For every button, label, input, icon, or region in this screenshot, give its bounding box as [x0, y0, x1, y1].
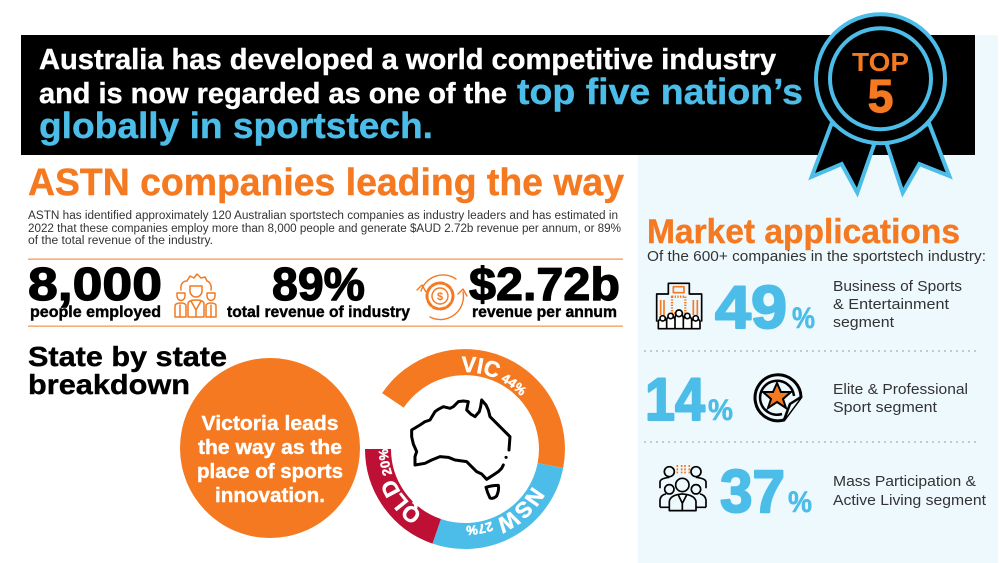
- stat: 89% total revenue: total revenue of industry: [227, 304, 410, 321]
- stat: $2.72b revenue per annum: $2.72b: [469, 258, 620, 310]
- stat: 37%: 37: [720, 458, 785, 525]
- text block: intro paragraph: of the total revenue of the industry.: [28, 235, 213, 247]
- text block: intro paragraph: 2022 that these companies employ more than 8,000 people and generate $AUD 2.72b revenue per annum, or 89%: [28, 223, 621, 235]
- banner line 2: and is now regarded as one of the: [39, 78, 507, 110]
- stat: 49%: [715, 274, 815, 341]
- panel: light blue background: [638, 35, 998, 563]
- stat: 14%: %: [708, 394, 733, 427]
- callout: Victoria leads circle: innovation.: [215, 485, 325, 507]
- heading: market applications: Market applications: [647, 213, 960, 251]
- badge number 5: 5: [868, 70, 893, 122]
- stat: 49%: %: [792, 302, 815, 335]
- banner: black headline: [21, 35, 975, 155]
- text: mass participation: Active Living segment: [833, 492, 987, 509]
- text: mass participation: [833, 473, 987, 509]
- text block: intro paragraph: ASTN has identified approximately 120 Australian sportstech companies as industry leaders and has estimated in: [28, 210, 618, 222]
- heading: state by state breakdown: [28, 341, 227, 400]
- icon: building with crowd: [657, 283, 702, 329]
- stat: 89% total revenue: [227, 258, 410, 321]
- badge text TOP: TOP: [852, 47, 909, 77]
- stat: 8,000 people employed: 8,000: [28, 258, 162, 310]
- text: business of sports: segment: [833, 314, 895, 331]
- text: elite and professional: Sport segment: [833, 399, 938, 416]
- segment: NSW: [437, 466, 550, 536]
- label: QLD 20%: QLD20%: [378, 449, 420, 522]
- icon: star sticker: [755, 375, 801, 421]
- banner line 1: Australia has developed a world competitive industry: [39, 44, 776, 76]
- icon: group of people: [660, 465, 706, 511]
- icon: orange gear with dollar: $: [437, 291, 443, 303]
- text: market applications intro: Of the 600+ companies in the sportstech industry:: [647, 249, 986, 265]
- callout: Victoria leads circle: Victoria leads: [202, 413, 338, 435]
- segment: VIC: [393, 362, 552, 466]
- text: elite and professional: [833, 381, 968, 416]
- segment: QLD: [378, 449, 437, 531]
- label: NSW 27%: NSW27%: [466, 487, 545, 536]
- callout: Victoria leads circle: place of sports: [197, 461, 343, 483]
- label: VIC 44%: VIC44%: [462, 356, 526, 396]
- text: business of sports: [833, 278, 962, 331]
- stat: $2.72b revenue per annum: revenue per annum: [472, 304, 617, 321]
- heading: ASTN companies: ASTN companies leading the way: [28, 162, 624, 204]
- text: elite and professional: Elite & Professional: [833, 381, 968, 398]
- text block: intro paragraph: [28, 210, 621, 247]
- banner highlight: top five nation’s: [517, 71, 803, 112]
- stat: 8,000 people employed: people employed: [30, 304, 161, 321]
- banner line 3: globally in sportstech.: [39, 105, 433, 146]
- text: mass participation: Mass Participation &: [833, 473, 976, 490]
- callout: Victoria leads circle: the way as the: [198, 437, 342, 459]
- chart: state donut: [365, 349, 565, 549]
- icon: orange workers with gear: [175, 274, 216, 317]
- text: business of sports: Business of Sports: [833, 278, 962, 295]
- icon: orange gear with dollar: [417, 275, 467, 320]
- stat: 37%: %: [788, 486, 812, 519]
- text: business of sports: & Entertainment: [833, 296, 950, 313]
- icon: top 5 ribbon badge: [812, 14, 949, 193]
- icon: Australia map: [412, 400, 510, 498]
- callout: Victoria leads circle: [180, 358, 360, 538]
- heading: state by state breakdown: breakdown: [28, 369, 190, 400]
- stat: 49%: 49: [715, 274, 787, 341]
- stat: 14%: 14: [645, 366, 706, 433]
- heading: state by state breakdown: State by state: [28, 341, 227, 372]
- stat: 89% total revenue: 89%: [272, 258, 365, 310]
